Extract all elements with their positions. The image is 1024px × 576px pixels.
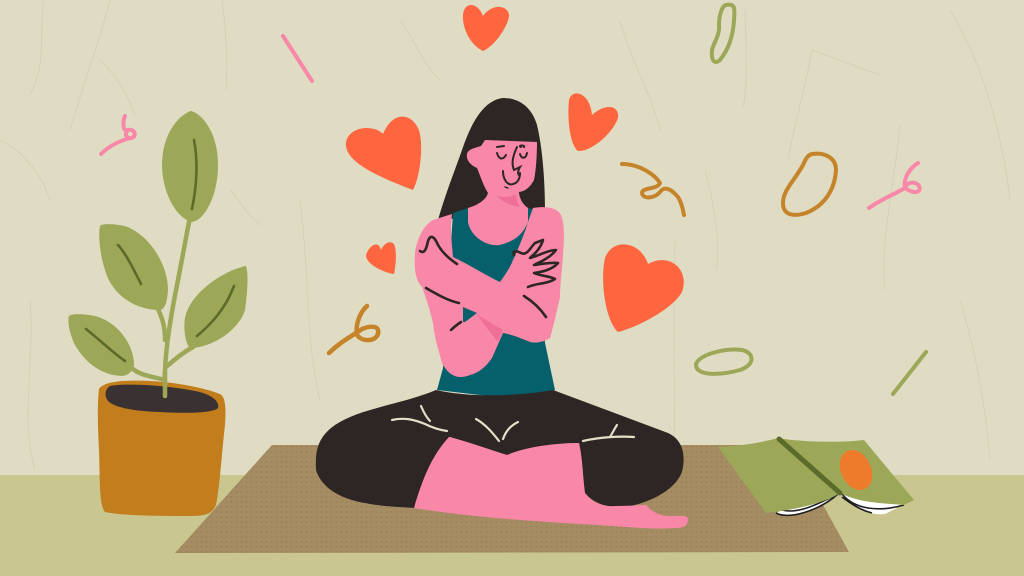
- brown curl lower: [329, 306, 378, 353]
- heart: top: [463, 5, 509, 51]
- olive loop top: [712, 5, 734, 62]
- pink curl right: [869, 163, 920, 208]
- neck shadow: [497, 194, 520, 207]
- book pages: [776, 480, 903, 516]
- leg crease lines: [392, 406, 634, 441]
- brown curl: [622, 164, 684, 215]
- heart: large left: [346, 117, 421, 190]
- legs: [316, 390, 684, 508]
- open book: [718, 438, 914, 516]
- pink curl left: [101, 116, 135, 154]
- hearts: [346, 5, 684, 332]
- crossed arms: [415, 207, 564, 377]
- orange spot: [834, 445, 878, 495]
- plant stems: [133, 218, 193, 396]
- neck and face: [467, 140, 537, 245]
- arm lines and fingers: [420, 237, 558, 330]
- floor: [0, 475, 1024, 576]
- book cover: [718, 438, 914, 513]
- face lines: [497, 146, 527, 188]
- flower pot: [98, 381, 225, 516]
- hair: [438, 98, 545, 220]
- arm shadow: [477, 314, 503, 342]
- pot soil: [106, 385, 218, 413]
- tank gap triangle: [463, 307, 477, 322]
- potted plant: [68, 111, 248, 516]
- squiggles: [101, 5, 926, 394]
- page lines: [776, 494, 904, 515]
- woman: [316, 98, 688, 529]
- olive line: [893, 352, 926, 394]
- foot and lower leg: [414, 437, 688, 529]
- plant leaves: [68, 111, 248, 376]
- brown oval: [783, 154, 836, 215]
- book spine: [779, 439, 840, 493]
- yoga mat: [175, 445, 849, 553]
- leaf veins: [86, 140, 234, 361]
- heart: small: [366, 242, 396, 274]
- tank top: [437, 208, 555, 397]
- olive oval: [696, 350, 752, 374]
- heart: upper right: [568, 93, 618, 151]
- pink line: [283, 36, 312, 81]
- heart: large right: [603, 244, 684, 332]
